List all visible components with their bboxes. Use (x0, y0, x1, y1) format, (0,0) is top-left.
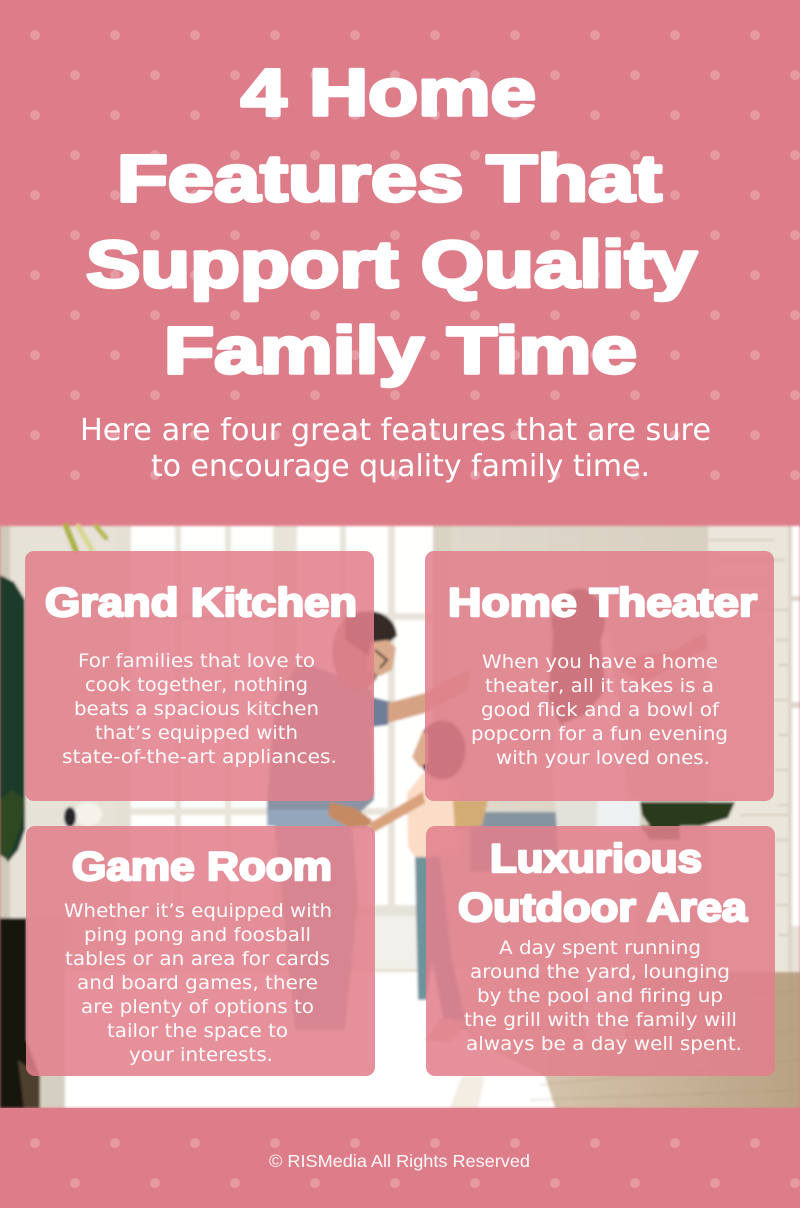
heading: Game Room: Game Room (72, 845, 332, 889)
body text: Game Room: your interests. (129, 1044, 273, 1066)
body text: Home Theater: with your loved ones. (496, 747, 710, 769)
body text: Game Room: Whether it’s equipped with (64, 900, 332, 922)
body text: Home Theater: theater, all it takes is a (485, 675, 714, 697)
subtitle: to encourage quality family time. (151, 449, 650, 484)
card: Luxurious Outdoor Area (426, 826, 775, 1076)
title: Family Time (164, 313, 637, 387)
body text: Grand Kitchen: state-of-the-art appliances. (62, 746, 337, 768)
woman (548, 588, 708, 1040)
card: Game Room (26, 826, 375, 1076)
window (116, 526, 456, 972)
body text: Grand Kitchen (62, 650, 337, 768)
man (267, 611, 470, 1030)
body text: Grand Kitchen: cook together, nothing (85, 674, 308, 696)
plant left (0, 575, 25, 862)
body text: Luxurious Outdoor Area: A day spent running (499, 937, 701, 959)
body text: Grand Kitchen: beats a spacious kitchen (74, 698, 319, 720)
body text: Game Room: tailor the space to (107, 1020, 288, 1042)
heading: Home Theater: Home Theater (448, 581, 757, 625)
girl (368, 720, 488, 1042)
body text: Grand Kitchen: For families that love to (78, 650, 315, 672)
heading: Grand Kitchen: Grand Kitchen (45, 581, 357, 625)
body text: Luxurious Outdoor Area: by the pool and firing up (477, 985, 723, 1007)
plant top (66, 526, 106, 551)
subtitle: Here are four great features that are sure (80, 413, 711, 448)
header panel (0, 0, 800, 526)
body text: Game Room: are plenty of options to (81, 996, 314, 1018)
background photo: family dancing in a bright living room (0, 526, 800, 1108)
title (86, 55, 697, 387)
footer panel (0, 1108, 800, 1208)
vase (0, 916, 65, 1108)
flowers (64, 802, 102, 827)
body text: Home Theater: good flick and a bowl of (481, 699, 720, 721)
body text: Game Room: and board games, there (77, 972, 318, 994)
body text: Grand Kitchen: that’s equipped with (95, 722, 298, 744)
card: Grand Kitchen (25, 551, 374, 801)
body text: Home Theater: When you have a home (482, 651, 718, 673)
body text: Luxurious Outdoor Area: always be a day well spent. (466, 1033, 742, 1055)
body text: Game Room: tables or an area for cards (65, 948, 330, 970)
heading: Luxurious Outdoor Area (458, 837, 748, 930)
couch (470, 812, 560, 872)
subtitle (80, 413, 711, 484)
body text: Luxurious Outdoor Area: the grill with the family will (464, 1009, 737, 1031)
floor (0, 972, 800, 1108)
body text: Home Theater (471, 651, 728, 769)
left wall (0, 526, 116, 971)
heading: Luxurious Outdoor Area: Outdoor Area (458, 886, 748, 930)
body text: Home Theater: popcorn for a fun evening (471, 723, 728, 745)
footer copyright text: © RISMedia All Rights Reserved (269, 1151, 530, 1171)
body text: Luxurious Outdoor Area: around the yard, lounging (470, 961, 730, 983)
body text: Luxurious Outdoor Area (464, 937, 742, 1055)
body text: Game Room (64, 900, 332, 1066)
body text: Game Room: ping pong and foosball (84, 924, 311, 946)
title: Features That (117, 141, 662, 215)
right wall (433, 526, 451, 971)
brick wall (708, 526, 800, 976)
title: Support Quality (86, 227, 697, 301)
card: Home Theater (425, 551, 774, 801)
heading: Luxurious Outdoor Area: Luxurious (490, 837, 702, 881)
title: 4 Home (241, 55, 536, 129)
plant right (640, 802, 735, 840)
